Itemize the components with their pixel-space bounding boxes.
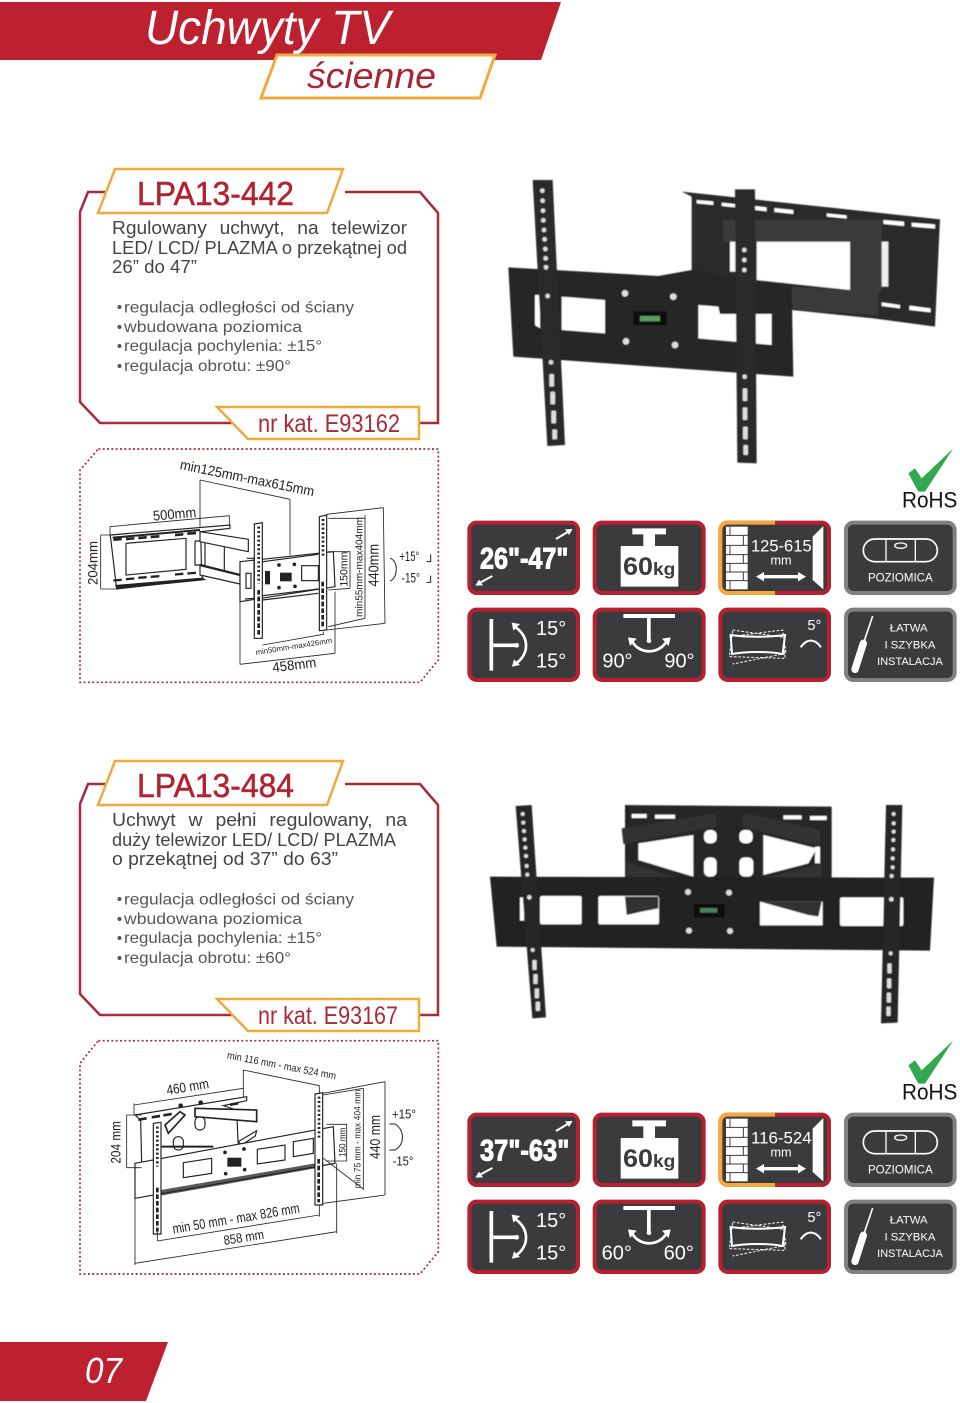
icon: easy install: I SZYBKA: [884, 639, 936, 651]
RoHS mark: RoHS: [902, 487, 957, 512]
icon: wall distance: [720, 523, 829, 593]
title: Uchwyty TV: [145, 2, 394, 55]
icon: levelling: [720, 610, 829, 680]
panel: LPA13-484 description: [80, 761, 438, 1031]
panel: LPA13-484 dimension drawing: 440 mm: [368, 1115, 384, 1159]
feature list: regulacja odległości od ściany: [124, 892, 354, 908]
icon: tilt: 15°: [536, 618, 566, 640]
icon: spirit level: POZIOMICA: [868, 570, 933, 584]
description text: Rgulowany uchwyt, na telewizor: [112, 218, 407, 238]
icon: easy install: [846, 1202, 955, 1272]
icon: screen size: [469, 1115, 578, 1185]
feature list: wbudowana poziomica: [123, 319, 302, 336]
description text: o przekątnej od 37” do 63”: [112, 849, 338, 869]
icon: swivel: 90°: [664, 650, 695, 672]
icon: easy install: ŁATWA: [890, 1215, 928, 1227]
feature list: regulacja obrotu: ±60°: [124, 950, 291, 967]
RoHS mark: [902, 1040, 957, 1104]
panel: LPA13-442 dimension drawing: 458mm: [271, 654, 317, 675]
feature list: wbudowana poziomica: [123, 911, 302, 928]
icon: max load: [595, 1115, 704, 1185]
feature list: regulacja pochylenia: ±15°: [124, 338, 322, 355]
icon: wall distance: mm: [770, 1145, 792, 1159]
panel: LPA13-484 dimension drawing: 204 mm: [108, 1121, 124, 1164]
icon: max load: 60kg: [623, 553, 675, 581]
icon: wall distance: 116-524: [751, 1130, 812, 1148]
icon grid: LPA13-484: [469, 1115, 955, 1272]
icon: easy install: I SZYBKA: [884, 1231, 936, 1243]
icon: screen size: 26"-47": [480, 542, 568, 575]
catalogue number: nr kat. E93167: [258, 1002, 398, 1030]
dimension lines: [101, 480, 385, 664]
panel: LPA13-442 dimension drawing: +15°: [399, 548, 419, 564]
description text: duży telewizor LED/ LCD/ PLAZMA: [112, 830, 396, 850]
catalogue number: nr kat. E93162: [258, 410, 400, 438]
panel: LPA13-442 dimension drawing: 500mm: [152, 504, 197, 524]
panel: LPA13-442 dimension drawing: 440mm: [366, 544, 382, 587]
product code: LPA13-442: [137, 175, 294, 212]
icon: spirit level: POZIOMICA: [868, 1162, 933, 1176]
description text: 26” do 47”: [112, 257, 197, 277]
panel: LPA13-442 dimension drawing: -15°: [402, 569, 420, 585]
panel: LPA13-442 dimension drawing: min55mm-max404mm: [354, 517, 365, 617]
catalogue number: [217, 407, 419, 439]
icon: wall distance: 125-615: [751, 538, 812, 556]
icon: levelling: 5°: [807, 618, 821, 634]
icon grid: LPA13-442: [469, 523, 955, 680]
icon: screen size: 37"-63": [480, 1134, 569, 1167]
footer page number: 07: [85, 1350, 124, 1391]
feature list: regulacja odległości od ściany: [124, 300, 354, 316]
icon: tilt: [469, 610, 578, 680]
description text: Uchwyt w pełni regulowany, na: [112, 810, 408, 830]
icon: tilt: [469, 1202, 578, 1272]
icon: easy install: ŁATWA: [890, 623, 928, 635]
description text: [112, 218, 407, 277]
icon: tilt: 15°: [536, 1210, 566, 1232]
icon: spirit level: [846, 1115, 955, 1185]
subtitle: ścienne: [307, 55, 436, 96]
panel: LPA13-484 dimension drawing: 460 mm: [165, 1075, 210, 1098]
icon: wall distance: [720, 1115, 829, 1185]
icon: easy install: [846, 610, 955, 680]
icon: easy install: INSTALACJA: [877, 656, 943, 668]
icon: spirit level: [846, 523, 955, 593]
description text: [112, 810, 408, 869]
photo: mount LPA13-442: [508, 180, 940, 463]
icon: easy install: INSTALACJA: [877, 1248, 943, 1260]
icon: levelling: [720, 1202, 829, 1272]
dimension label: min 116 mm - max 524 mm: [226, 1050, 337, 1082]
catalogue number: [217, 999, 419, 1031]
icon: max load: [595, 523, 704, 593]
product code: LPA13-484: [137, 767, 294, 804]
icon: wall distance: mm: [770, 553, 792, 567]
feature list: regulacja obrotu: ±90°: [124, 358, 291, 375]
icon: swivel: 90°: [602, 650, 633, 672]
panel: LPA13-484 dimension drawing: 858 mm: [222, 1227, 265, 1248]
icon: swivel: [595, 610, 704, 680]
panel: LPA13-442 dimension drawing: 150mm: [338, 552, 350, 587]
feature list: [118, 300, 354, 375]
icon: screen size: [469, 523, 578, 593]
panel: LPA13-484 dimension drawing: [80, 1041, 438, 1274]
panel: LPA13-484 dimension drawing: min 50 mm - max 826 mm: [171, 1200, 301, 1237]
icon: swivel: 60°: [664, 1242, 694, 1264]
panel: LPA13-442 dimension drawing: min50mm-max426mm: [255, 636, 333, 657]
RoHS mark: [902, 448, 957, 512]
feature list: [118, 892, 354, 967]
panel: LPA13-484 dimension drawing: 150 mm: [337, 1127, 347, 1157]
RoHS mark: RoHS: [902, 1079, 957, 1104]
icon: swivel: 60°: [602, 1242, 632, 1264]
dimension label: min125mm-max615mm: [179, 456, 316, 499]
feature list: regulacja pochylenia: ±15°: [124, 930, 322, 947]
panel: LPA13-484 dimension drawing: -15°: [393, 1154, 413, 1169]
icon: tilt: 15°: [536, 1242, 566, 1264]
icon: swivel: [595, 1202, 704, 1272]
icon: tilt: 15°: [536, 650, 566, 672]
footer page number: [0, 1342, 168, 1401]
panel: LPA13-484 dimension drawing: +15°: [392, 1106, 416, 1121]
header banner: [0, 2, 561, 98]
dimension lines: [127, 1070, 385, 1265]
panel: LPA13-442 dimension drawing: [80, 449, 438, 682]
panel: LPA13-442 description: [80, 169, 438, 439]
icon: max load: 60kg: [623, 1145, 675, 1173]
panel: LPA13-442 dimension drawing: 204mm: [84, 541, 100, 585]
panel: LPA13-484 dimension drawing: min 75 mm - max 404 mm: [353, 1089, 363, 1188]
description text: LED/ LCD/ PLAZMA o przekątnej od: [112, 238, 407, 258]
icon: levelling: 5°: [807, 1210, 821, 1226]
photo: mount LPA13-484: [490, 805, 934, 1023]
